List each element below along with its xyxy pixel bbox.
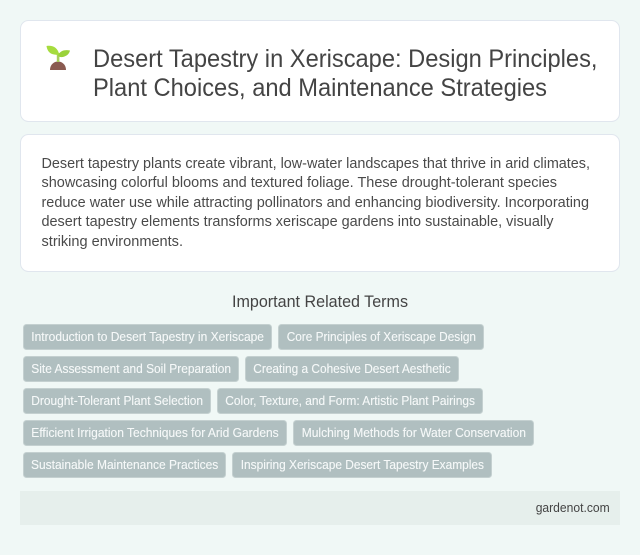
footer bar [20,491,620,525]
text block: description: reduce water use while attracting pollinators and enhancing biodiversity. Incorporating [42,194,589,211]
tag: irrigation: Efficient Irrigation Techniques for Arid Gardens [31,426,279,440]
tag: mulching: Mulching Methods for Water Conservation [302,426,526,440]
tag: cohesive aesthetic: Creating a Cohesive Desert Aesthetic [253,362,451,376]
text block: description [42,155,590,250]
icon: sprout [46,46,70,70]
tag: introduction [24,324,272,350]
text block: description: showcasing colorful blooms and textured foliage. These drought-tolerant species [42,174,557,191]
tag: core principles: Core Principles of Xeriscape Design [287,330,476,344]
text block: description: desert tapestry elements transforms xeriscape gardens into sustainable, visually [42,213,554,230]
footer source text: gardenot.com [536,500,610,515]
tag: introduction: Introduction to Desert Tapestry in Xeriscape [31,330,264,344]
tag: inspiring examples [232,452,492,478]
panel: related term tags [24,324,534,478]
tag: inspiring examples: Inspiring Xeriscape Desert Tapestry Examples [241,458,484,472]
tag: color texture form [218,388,482,414]
tag: irrigation [24,420,286,446]
tag: core principles [278,324,484,350]
tag: maintenance: Sustainable Maintenance Practices [31,458,218,472]
panel: header card [20,20,620,122]
text block: description: Desert tapestry plants create vibrant, low-water landscapes that thrive in arid climates, [42,155,590,172]
tag: site assessment [24,356,238,382]
tag: cohesive aesthetic [246,356,458,382]
title: Plant Choices, and Maintenance Strategies [93,74,547,102]
heading: important related terms: Important Related Terms [232,292,408,311]
tag: mulching [294,420,534,446]
tag: plant selection: Drought-Tolerant Plant Selection [31,394,203,408]
tag: maintenance [24,452,226,478]
tag: plant selection [24,388,210,414]
title: Desert Tapestry in Xeriscape: Design Principles, [93,45,598,73]
title [93,45,598,102]
panel: description card [20,134,620,272]
text block: description: striking environments. [42,233,183,250]
tag: color texture form: Color, Texture, and Form: Artistic Plant Pairings [225,394,475,408]
tag: site assessment: Site Assessment and Soil Preparation [31,362,231,376]
